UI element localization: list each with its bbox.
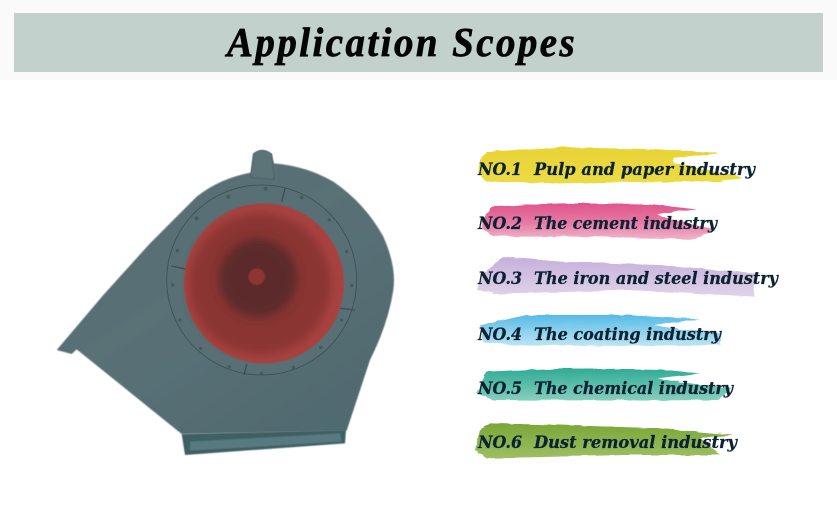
fan housing	[57, 150, 394, 434]
item: NO.2 cement	[477, 203, 718, 239]
item: NO.5 chemical: The chemical industry	[534, 379, 734, 398]
item: NO.5 chemical	[477, 368, 734, 401]
list: application industries	[475, 147, 779, 458]
fan hub	[248, 268, 265, 285]
red inlet cone	[184, 203, 344, 363]
title banner	[14, 13, 823, 72]
item: NO.6 dust removal: Dust removal industry	[533, 433, 738, 452]
bolts	[171, 187, 353, 375]
item: NO.6 dust removal: NO.6	[477, 433, 522, 452]
title: Application Scopes	[224, 19, 575, 65]
item: NO.1 pulp and paper: Pulp and paper industry	[533, 160, 756, 179]
illustration: centrifugal fan	[57, 150, 394, 455]
item: NO.3 iron and steel: NO.3	[477, 269, 522, 288]
item: NO.3 iron and steel	[477, 257, 779, 297]
item: NO.6 dust removal	[475, 423, 738, 458]
item: NO.1 pulp and paper: NO.1	[477, 160, 522, 179]
item: NO.3 iron and steel: The iron and steel industry	[534, 269, 779, 288]
top bracket	[251, 150, 274, 179]
ring seams	[172, 188, 355, 375]
item: NO.5 chemical: NO.5	[477, 379, 522, 398]
item: NO.4 coating: NO.4	[477, 325, 522, 344]
item: NO.4 coating	[477, 315, 722, 346]
item: NO.1 pulp and paper	[477, 147, 756, 183]
flange ring	[167, 185, 357, 375]
item: NO.2 cement: NO.2	[477, 214, 522, 233]
item: NO.4 coating: The coating industry	[534, 325, 722, 344]
base flange	[182, 430, 346, 455]
item: NO.2 cement: The cement industry	[534, 214, 718, 233]
